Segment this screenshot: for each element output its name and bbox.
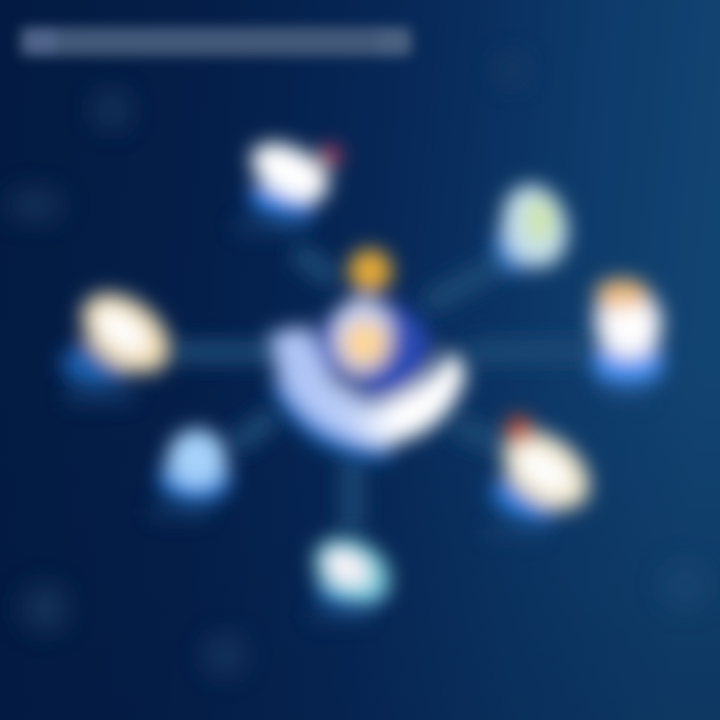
- central hub: [274, 249, 462, 454]
- diagram group: [62, 131, 669, 615]
- hub core: [343, 321, 387, 365]
- node: left card: [62, 277, 185, 389]
- hub halo: [314, 300, 430, 400]
- hub platform: [274, 330, 462, 440]
- node: right card: [587, 278, 669, 388]
- hub platform shadow: [276, 385, 400, 454]
- connector lines: [175, 250, 590, 530]
- node: top left card: [242, 131, 341, 228]
- node: bottom card: [303, 525, 401, 615]
- title bar: [20, 27, 412, 56]
- hub gold coin: [348, 249, 392, 293]
- node: lower left bubble: [159, 429, 231, 504]
- node: lower right card: [485, 415, 604, 532]
- hub upper column: [332, 297, 392, 373]
- node captions: [65, 218, 650, 622]
- node: top right bubble: [493, 177, 577, 275]
- hub inner shadow: [322, 364, 374, 400]
